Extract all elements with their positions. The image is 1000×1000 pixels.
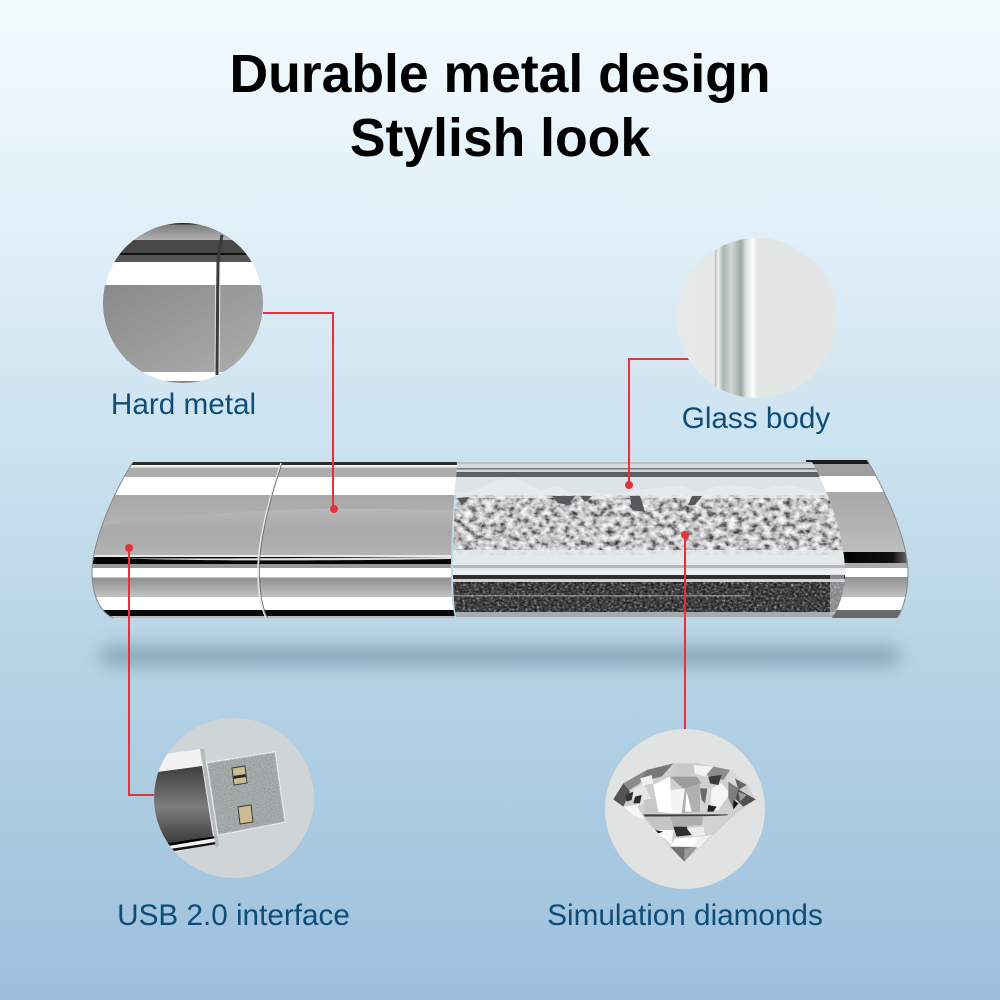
title: Durable metal design: [229, 45, 771, 104]
icon: diamond: [613, 763, 756, 862]
right cap: [800, 460, 910, 620]
USB flash drive: [90, 460, 910, 620]
label: glass body: Glass body: [682, 402, 830, 435]
body seam: [258, 463, 281, 618]
circle: glass body close-up: [677, 238, 837, 398]
dark crystal facets: [457, 496, 702, 512]
crystal texture: [450, 495, 850, 555]
callout line: USB interface: [125, 544, 155, 795]
left end edge: [92, 462, 133, 618]
callout line: simulation diamonds: [681, 531, 689, 729]
circle: diamond close-up: [605, 729, 765, 889]
title: Stylish look: [350, 109, 650, 168]
label: hard metal: Hard metal: [111, 388, 256, 421]
label: USB interface: USB 2.0 interface: [117, 899, 350, 932]
crystal bumps: [455, 495, 828, 498]
callout line: hard metal: [263, 313, 338, 513]
title: [229, 45, 771, 168]
USB metal plug: [207, 752, 285, 835]
right end edge: [867, 460, 908, 618]
circle: hard metal close-up: [103, 223, 263, 383]
pale lower crystals: [453, 550, 845, 568]
circle: USB connector close-up: [150, 718, 314, 878]
callout line: glass body: [625, 359, 689, 489]
drive shadow: [100, 647, 900, 665]
lower dark grit: [450, 582, 850, 613]
USB chrome housing: [154, 749, 215, 852]
crystal glass section: [450, 460, 850, 620]
label: simulation diamonds: Simulation diamonds: [547, 899, 823, 932]
USB contact holes: [232, 766, 247, 785]
metal cap and body: [90, 460, 460, 620]
